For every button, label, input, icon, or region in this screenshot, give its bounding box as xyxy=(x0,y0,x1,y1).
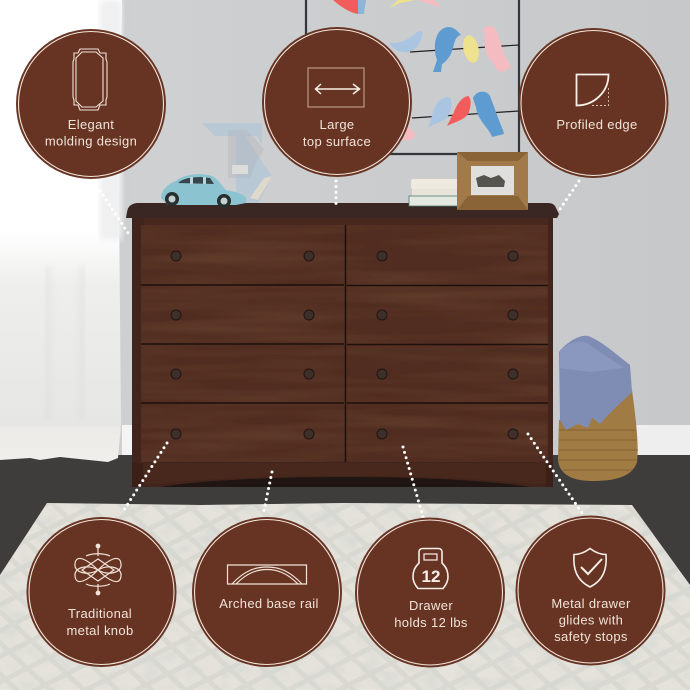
base rail xyxy=(144,463,546,484)
icon: arch rail xyxy=(228,565,306,584)
badge: metal drawer glides with safety stops: safety stops xyxy=(554,629,628,644)
icon: molding frame xyxy=(73,49,107,110)
badge: large top surface: top surface xyxy=(303,134,371,149)
label: Metal drawer xyxy=(551,596,631,611)
icon: shield with check xyxy=(574,548,606,587)
label: Traditional xyxy=(68,606,132,621)
dresser xyxy=(126,203,559,487)
birds cropped at top edge xyxy=(333,0,442,14)
label: Drawer xyxy=(409,598,453,613)
badge: drawer holds 12 lbs xyxy=(355,518,505,668)
badge: drawer holds 12 lbs: holds 12 lbs xyxy=(394,615,468,630)
books xyxy=(409,179,458,206)
icon: ornament xyxy=(75,544,121,595)
drawers xyxy=(141,225,548,462)
icon: kettlebell xyxy=(413,548,448,588)
wall art: birds on wires xyxy=(306,0,519,154)
rug xyxy=(0,503,690,690)
icon: kettlebell: 12 xyxy=(422,567,440,586)
label: Elegant xyxy=(68,117,114,132)
icon: profiled corner xyxy=(576,74,608,106)
badge: metal drawer glides with safety stops: glides with xyxy=(559,612,623,628)
toy car xyxy=(161,174,246,208)
letter E decor xyxy=(202,123,272,204)
curtain xyxy=(0,0,122,462)
badge: metal drawer glides with safety stops xyxy=(516,516,666,666)
picture frame xyxy=(457,152,528,210)
knobs xyxy=(171,251,518,439)
icon: surface with arrow xyxy=(308,68,364,107)
badge: elegant molding design xyxy=(16,29,166,179)
label: Large xyxy=(320,117,354,132)
birds, bottom row xyxy=(403,92,504,140)
label: Profiled edge xyxy=(556,117,638,132)
birds, top row xyxy=(389,26,511,72)
badge: profiled edge xyxy=(518,28,668,178)
badge: elegant molding design: molding design xyxy=(45,134,137,148)
dresser body xyxy=(132,215,553,487)
dresser top xyxy=(126,203,559,218)
badge: large top surface xyxy=(262,27,412,177)
basket with blanket xyxy=(558,336,638,481)
badge: arched base rail xyxy=(192,517,342,667)
dotted leader lines xyxy=(97,181,582,517)
badge: traditional metal knob xyxy=(26,517,176,667)
badge: traditional metal knob: metal knob xyxy=(66,623,134,638)
label: Arched base rail xyxy=(219,596,319,611)
